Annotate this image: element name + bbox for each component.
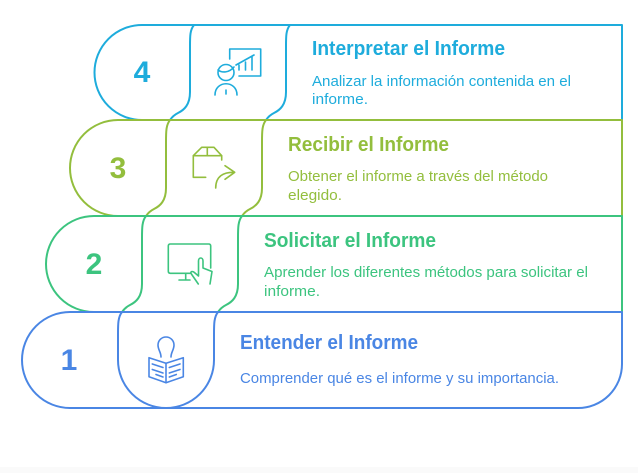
text: step 3 description: Obtener el informe a través del método — [288, 168, 548, 185]
heading: step 4: Interpretar el Informe — [312, 38, 505, 60]
icon: package with arrow — [193, 147, 235, 188]
number 2: 2 — [86, 248, 102, 281]
text: step 4 description: Analizar la información contenida en el — [312, 73, 571, 90]
icon: person reading a book — [149, 337, 183, 383]
icon: presenter with chart — [215, 49, 261, 95]
number 1: 1 — [61, 344, 77, 377]
panel: step 1 Entender el Informe — [22, 312, 622, 408]
heading: step 3: Recibir el Informe — [288, 134, 449, 156]
heading: step 1: Entender el Informe — [240, 332, 418, 354]
panel: step 3 Recibir el Informe — [70, 120, 622, 216]
icon: monitor with pointing hand — [168, 244, 212, 284]
panel: step 2 Solicitar el Informe — [46, 216, 622, 312]
number 4: 4 — [134, 56, 151, 89]
number 3: 3 — [110, 152, 126, 185]
text: step 2 description: Aprender los diferentes métodos para solicitar el — [264, 264, 588, 281]
text: step 1 description: Comprender qué es el informe y su importancia. — [240, 370, 559, 387]
text: step 4 description: informe. — [312, 91, 368, 108]
text: step 2 description: informe. — [264, 283, 320, 300]
text: step 3 description: elegido. — [288, 187, 342, 204]
panel: step 4 Interpretar el Informe — [95, 25, 622, 120]
heading: step 2: Solicitar el Informe — [264, 230, 436, 252]
